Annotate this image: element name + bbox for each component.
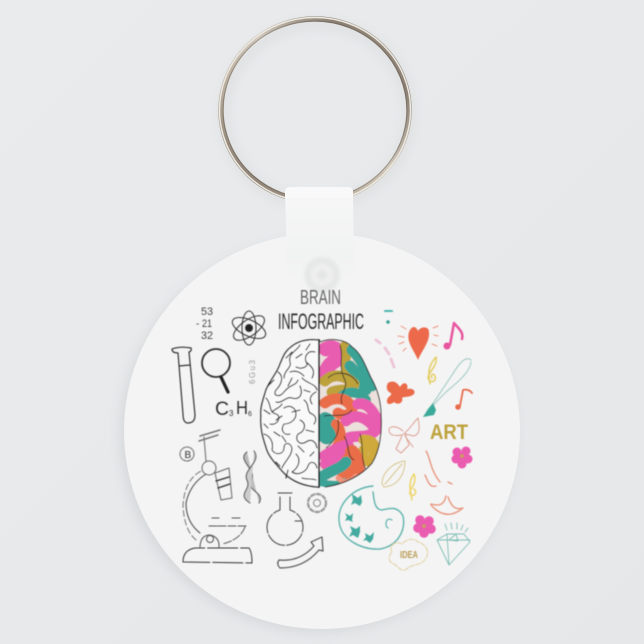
- icon: magnifying glass: [202, 349, 230, 392]
- icon: round flask: [267, 493, 303, 545]
- icon: paint brush: [423, 359, 471, 417]
- chemical formula: C: [215, 399, 229, 420]
- title: [278, 287, 364, 334]
- science doodles: [172, 306, 326, 568]
- chemical formula: 6: [248, 411, 252, 418]
- icon: pink flower 2: [413, 515, 436, 538]
- small vertical formula: 6Gu3: [248, 359, 257, 384]
- icon: pink music note: [444, 323, 462, 350]
- arrow: [278, 537, 323, 568]
- title: BRAIN: [300, 287, 341, 309]
- keychain disc: [124, 233, 520, 629]
- icon: paint palette: [339, 486, 404, 549]
- icon: atom: [229, 311, 269, 345]
- brain: [261, 336, 384, 490]
- chemical formula: H: [236, 398, 248, 418]
- icon: coin: [180, 447, 194, 461]
- numbers: subtraction sum: [196, 306, 213, 342]
- icon: paint splat: [387, 382, 415, 404]
- icon: idea cloud: [389, 539, 428, 570]
- icon: gear: [308, 494, 326, 512]
- keychain disc shadow: [120, 240, 516, 632]
- icon: DNA helix: [244, 451, 260, 503]
- strap snap button: [304, 257, 340, 293]
- title: INFOGRAPHIC: [278, 309, 364, 334]
- numbers: subtraction sum: 32: [201, 330, 213, 342]
- icon: diamond: [437, 523, 470, 565]
- numbers: subtraction sum: -: [196, 319, 199, 330]
- icon: test tube: [172, 347, 195, 423]
- brain left half: line art: [261, 340, 319, 487]
- art doodles: [339, 311, 472, 570]
- icon: microscope: [183, 430, 252, 563]
- icon: gold treble clef 2: [410, 474, 416, 500]
- icon: coin: B: [184, 450, 192, 461]
- numbers: subtraction sum: 53: [201, 306, 213, 318]
- chemical formula: [215, 398, 252, 420]
- brain right half: coloured lobes: [318, 336, 384, 490]
- icon: bow: [389, 418, 419, 453]
- metal key ring: [220, 18, 410, 204]
- ART lettering: ART: [430, 421, 468, 444]
- plastic strap: [285, 187, 354, 304]
- icon: small orange music note: [455, 390, 472, 410]
- numbers: subtraction sum: 21: [202, 318, 212, 330]
- icon: idea cloud: IDEA: [400, 550, 418, 561]
- icon: gold treble clef: [428, 357, 436, 384]
- icon: leaf: [382, 461, 405, 487]
- icon: heart: [398, 326, 438, 360]
- icon: faint pink pencil: [376, 340, 394, 367]
- icon: pink flower: [452, 446, 472, 468]
- icon: orange instrument sketch: [425, 451, 463, 514]
- icon: teal marks: [385, 311, 392, 324]
- chemical formula: 3: [229, 409, 234, 418]
